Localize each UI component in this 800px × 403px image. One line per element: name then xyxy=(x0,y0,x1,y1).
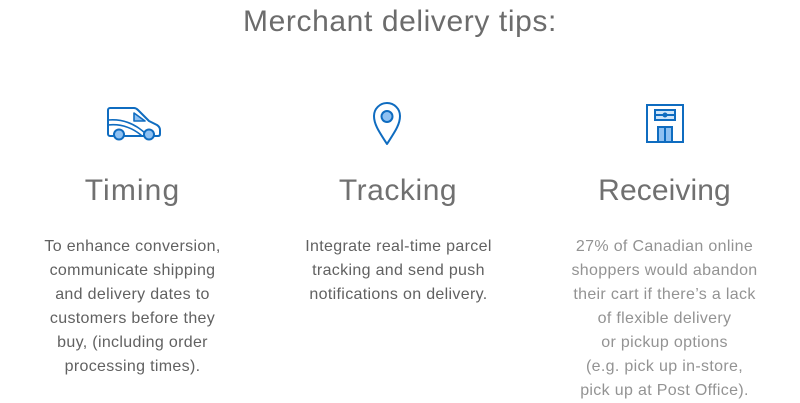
text: receiving tip: or pickup options xyxy=(601,334,728,351)
heading: Receiving: Receiving xyxy=(598,174,731,207)
text: receiving tip xyxy=(571,238,758,399)
text: timing tip: communicate shipping xyxy=(50,262,215,279)
text: receiving tip: pick up at Post Office). xyxy=(580,382,749,399)
text: timing tip: buy, (including order xyxy=(57,334,208,351)
heading: Timing: Timing xyxy=(85,174,180,207)
text: receiving tip: shoppers would abandon xyxy=(571,262,758,279)
heading: Tracking: Tracking xyxy=(339,174,457,207)
text: timing tip: To enhance conversion, xyxy=(44,238,221,255)
text: timing tip: processing times). xyxy=(65,358,200,375)
text: tracking tip xyxy=(305,238,492,303)
text: timing tip: and delivery dates to xyxy=(55,286,210,303)
text: receiving tip: their cart if there’s a lack xyxy=(573,286,756,303)
title: Merchant delivery tips: xyxy=(243,5,557,38)
text: receiving tip: 27% of Canadian online xyxy=(576,238,753,255)
text: timing tip: customers before they xyxy=(50,310,215,327)
text: tracking tip: tracking and send push xyxy=(312,262,485,279)
text: tracking tip: Integrate real-time parcel xyxy=(305,238,492,255)
text: receiving tip: of flexible delivery xyxy=(598,310,731,327)
text: timing tip xyxy=(44,238,221,375)
text: receiving tip: (e.g. pick up in-store, xyxy=(586,358,743,375)
text: tracking tip: notifications on delivery. xyxy=(309,286,488,303)
